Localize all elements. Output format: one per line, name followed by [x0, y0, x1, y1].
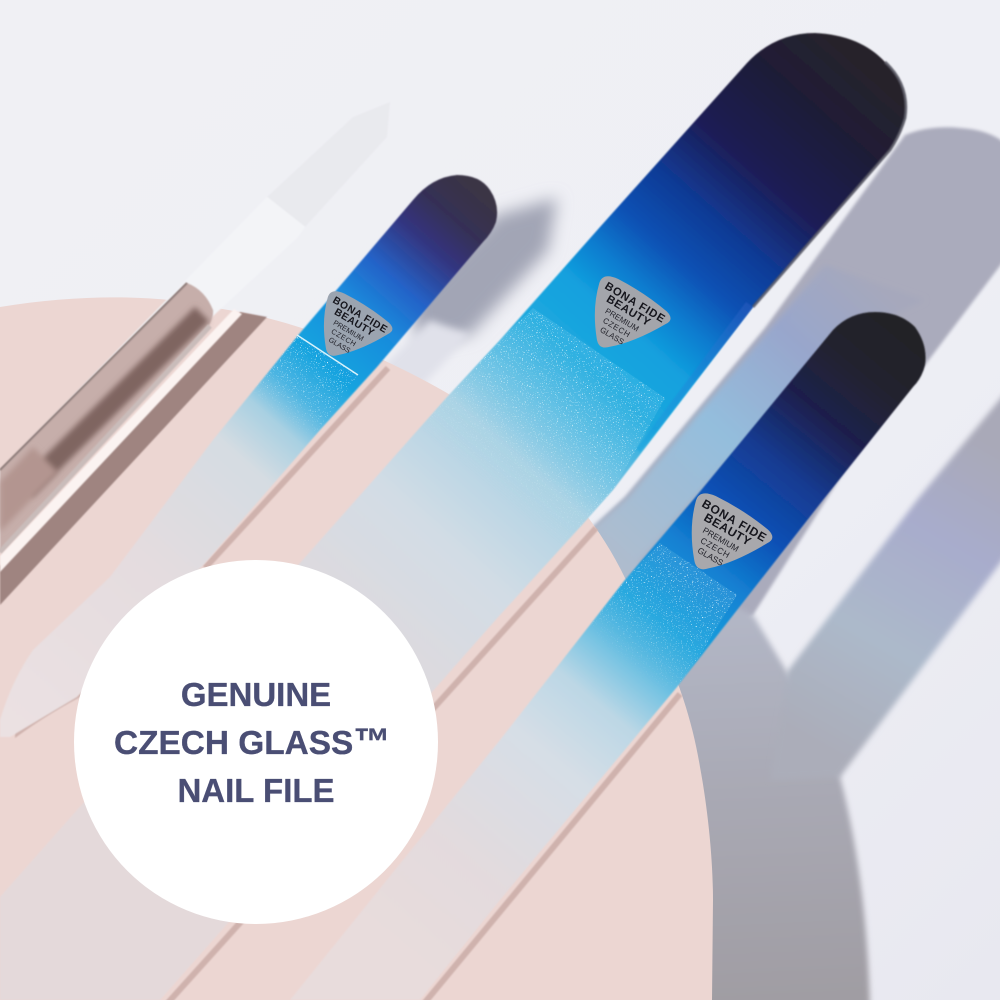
title text: CZECH GLASS™ — [114, 721, 390, 762]
title text: NAIL FILE — [177, 772, 335, 809]
sparkle area — [254, 337, 356, 433]
bevel edge — [753, 62, 906, 307]
badge: CZECH — [699, 535, 731, 560]
badge: CZECH — [330, 327, 358, 348]
badge: PREMIUM — [604, 306, 640, 334]
badge: PREMIUM — [701, 525, 741, 554]
title text — [114, 676, 390, 809]
file body — [290, 312, 926, 1000]
groove end near small file tip — [15, 682, 90, 738]
shadow: large file — [590, 127, 1000, 640]
white circle — [74, 560, 438, 924]
edge band — [636, 302, 753, 452]
top thin edge — [0, 283, 187, 470]
badge: GLASS — [598, 325, 626, 347]
badge: BONA FIDE — [700, 496, 769, 545]
title callout circle — [74, 560, 438, 924]
badge — [667, 488, 777, 593]
clear glass file — [0, 102, 390, 605]
glass section seen over disc — [0, 283, 213, 553]
grit line — [297, 335, 358, 375]
badge: BEAUTY — [604, 293, 653, 329]
badge: BONA FIDE — [330, 295, 389, 336]
file body — [0, 175, 497, 737]
glass edge highlight — [0, 309, 242, 572]
grey strip above edge — [0, 326, 210, 552]
shadow: right file — [770, 387, 1000, 780]
badge — [303, 287, 396, 376]
badge: GLASS — [327, 335, 352, 355]
title text: GENUINE — [181, 676, 331, 713]
large file — [298, 32, 908, 692]
groove under large file — [165, 528, 596, 1000]
sparkle area — [432, 310, 664, 528]
badge: BONA FIDE — [602, 280, 667, 326]
pink disc — [0, 297, 713, 1000]
disc grooves — [15, 368, 680, 1000]
shadows on the background — [370, 127, 1000, 1000]
groove under right file — [422, 694, 680, 1000]
badge: BEAUTY — [332, 307, 376, 339]
pale shadow under small file — [370, 320, 470, 415]
dark band on the disc — [0, 312, 267, 605]
sparkle area — [591, 544, 736, 687]
badge: PREMIUM — [332, 318, 366, 343]
small file — [0, 175, 497, 737]
badge: BEAUTY — [702, 510, 754, 548]
frosted patch tint — [499, 308, 665, 460]
badge — [571, 271, 675, 370]
lower reflection section — [0, 447, 58, 532]
blue reflection between files — [590, 265, 925, 580]
badge: CZECH — [601, 316, 632, 339]
shadow: small file — [410, 198, 557, 345]
groove under small file — [205, 368, 388, 568]
badge: GLASS — [696, 545, 725, 568]
right file — [290, 312, 926, 1000]
dark brown band — [25, 314, 202, 490]
clear body — [0, 197, 305, 553]
frosted patch tint — [614, 543, 737, 662]
shadow: disc — [590, 540, 870, 1000]
frosted tip — [267, 102, 390, 227]
